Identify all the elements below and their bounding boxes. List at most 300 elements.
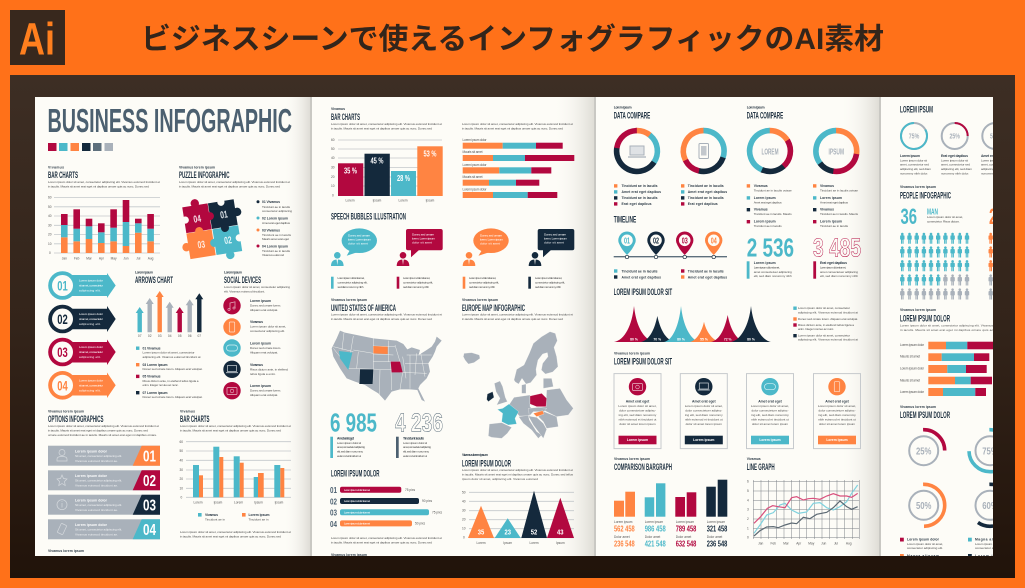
big number 3 485 outline: Erat eget dapibus (820, 261, 847, 265)
big number 3 485 outline: elit, sed diam nonummy nibh (820, 274, 858, 278)
panel: people infographic: Lorem ipsum dolor sit amet, (927, 215, 963, 219)
donut 4: IPSUM (829, 146, 844, 156)
social text: Lorem ipsum (250, 384, 271, 388)
panel: puzzle infographic: Lorem ipsum dolor sit amet, consectetur adipiscing elit. Vivamus euismod tincidunt et (179, 180, 290, 184)
ring captions: amet, consectetur sed (981, 163, 1010, 167)
option 04: Lorem ipsum dolor (75, 523, 108, 527)
panel: stacked bar chart: Vivamus (48, 166, 64, 170)
panel: puzzle infographic (179, 166, 292, 260)
timeline legend (614, 269, 727, 279)
ring captions: adipiscing elit, sed diam (981, 167, 1012, 171)
panel: options infographics: OPTIONS INFOGRAPHICS (48, 414, 104, 425)
panel: percentage bar chart: 10 (331, 184, 335, 188)
timeline legend: Tincidunt ae in laculis (622, 269, 658, 273)
panel: line graph: Mar (783, 542, 790, 546)
option 02: Vivamus euismod tincidunt ae. (75, 484, 118, 488)
big number 4 236 outline: Lorem ipsum dolor sit (403, 441, 427, 445)
panel: triangle chart: Ipsum (556, 541, 565, 545)
arrow 03 (48, 338, 116, 366)
panel: triangle chart: 35 (478, 528, 484, 536)
panel: line graph: 3 (747, 508, 749, 512)
icon: music (223, 297, 241, 314)
big number 2 536: elit, sed diam nonummy nibh (754, 274, 792, 278)
speech bubble crimson: Donec sed ornare (412, 232, 434, 236)
panel: percent rings: LOREM IPSUM (900, 104, 933, 116)
pin 04: 04 (711, 236, 717, 245)
panel: stacked rows: Lorem ipsum dolor (900, 343, 925, 347)
puzzle legend: Vivamus euismod (262, 253, 284, 257)
panel: grouped bar chart: in iaculis. Mauris sit amet erat eget mi dapibus ornare quis ac nunc. Donec sed (180, 428, 281, 432)
ring captions: Lorem ipsum (900, 154, 920, 158)
panel: United States map: UNITED STATES OF AMERICA (331, 303, 396, 314)
panel: United States map: Vivamus lorem ipsum (331, 298, 367, 302)
puzzle legend: Amet erat eget dapibus (262, 221, 290, 225)
donut 3 and 4 legends: Tincidunt ae in laculis (754, 224, 782, 228)
card laptop: Amet erat eget (692, 399, 716, 403)
panel: icon cards: LOREM IPSUM DOLOR SIT (614, 356, 672, 368)
icon: laptop (223, 361, 241, 378)
card phone: dolor consectetuer adipisc- (819, 408, 855, 412)
panel: stacked rows: Mauris sit amet (900, 354, 920, 358)
panel: mountain chart: 55 % (700, 338, 708, 342)
donut 3 and 4 legends: Vivamus (820, 208, 834, 212)
arrows legend: enim. Integer non leo ac nunc. (142, 383, 179, 387)
panel: line graph: 0 (747, 536, 749, 540)
option 04: Vivamus euismod tincidunt ae. (75, 532, 118, 536)
big number 4 236 outline: amet, consectetur adipiscing (403, 445, 431, 449)
puzzle pieces: 04 (193, 214, 202, 226)
social text: Aliquam erat volutpat. (250, 393, 278, 397)
ring captions: Erat eget dapibus (941, 154, 968, 158)
panel: stacked rows: in iaculis. Mauris sit amet erat eget mi dapibus ornare quis ac (900, 328, 993, 332)
panel: stacked bar chart: Mar (86, 256, 93, 260)
card game controller: Lorem ipsum (759, 438, 781, 442)
panel: percentage bar chart: Lorem (345, 198, 355, 202)
panel: stacked bar chart: Feb (74, 256, 80, 260)
panel: comparison bargraph: 789 458 (676, 523, 696, 533)
mountain legend: Lorem ipsum dolor sit amet, consectetur (798, 306, 850, 310)
panel: horizontal stacked bars: Lorem ipsum dolor (462, 187, 487, 191)
big number 4 236 outline: elit, sed diam nonummy (403, 449, 429, 453)
panel: triangle chart: in iaculis. Mauris sit amet erat eget mi dapibus ornare quis ac nunc. Donec sed tellus (462, 472, 573, 476)
card camera: dolor sit amet lorem ipsum (619, 422, 656, 426)
panel: options infographics: Lorem ipsum dolor sit amet, consectetur adipiscing elit. Vivamus euismod tincidunt et (48, 424, 159, 428)
option 01: Sit amet, consectetur adipiscing elit. (75, 454, 122, 458)
option 01: Vivamus euismod tincidunt ae. (75, 459, 118, 463)
panel: percentage bar chart: 60 (331, 138, 335, 142)
social text: Vivamus (250, 320, 263, 324)
panel: grouped bar chart: Lorem ipsum (248, 513, 270, 517)
social text: Vivamus (250, 363, 263, 367)
card phone: dolor sit amet lorem ipsum (819, 422, 856, 426)
big number 2 536: Lorem ipsum (754, 261, 776, 265)
donut 3 and 4 legends (747, 184, 858, 228)
option 04: 04 (143, 522, 156, 539)
panel: line graph: Aug (846, 542, 852, 546)
ring captions: Lorem ipsum dolor sit (941, 158, 968, 162)
panel: mountain chart: 70 % (653, 338, 661, 342)
up arrows (136, 291, 203, 332)
panel: triangle chart: Lorem ipsum dolor sit amet, consectetur adipiscing elit. Vivamus euismod tincidunt et (462, 468, 573, 472)
panel: stacked bar chart: 40 (48, 214, 52, 218)
panel: grouped bar chart: Lorem ipsum dolor sit amet, consectetur adipiscing elit. Vivamus euismod tincidunt et (180, 530, 291, 534)
gauge 25%: 25% (916, 446, 932, 458)
panel: progress bars: Lorem ipsum dolor sit amet (344, 510, 370, 514)
puzzle legend: 03 Vivamus (262, 228, 280, 232)
panel: stacked rows: Lorem ipsum dolor (900, 390, 925, 394)
puzzle pieces: 02 (224, 235, 233, 247)
big number 4 236 outline: 4 236 (395, 408, 443, 438)
puzzle legend: Tincidunt ae in laculis (262, 233, 291, 237)
gauge 75%: 75% (982, 446, 998, 458)
panel: line graph: 6 (747, 480, 749, 484)
card phone: Amet erat eget (825, 399, 850, 403)
panel: percentage bar chart: 30 (331, 166, 335, 170)
panel: line graph: Apr (796, 542, 802, 546)
panel: grouped bar chart: Lorem (234, 500, 243, 504)
panel: triangle chart: 10 (462, 527, 466, 531)
panel: mountain chart (614, 287, 858, 342)
puzzle legend: 04 Lorem ipsum (262, 244, 288, 248)
social text: Aliquam erat volutpat. (250, 308, 278, 312)
big number 6 985: 6 985 (330, 408, 377, 438)
panel: data compare right (741, 106, 865, 228)
panel: stacked rows (900, 308, 997, 396)
donut 1 and 2 legends: Erat eget dapibus (622, 202, 652, 206)
panel: grouped bar chart: Tincidunt ae in (248, 518, 269, 522)
panel: stacked bar chart: Jun (123, 256, 129, 260)
panel: arrows chart: 02 (148, 334, 152, 338)
panel: progress bars: Lorem ipsum dolor sit amet (344, 522, 370, 526)
arrow 02: 02 (57, 311, 68, 327)
card laptop: dolor sit amet lorem ipsum (686, 422, 722, 426)
panel: percentage bar chart: 45 % (370, 156, 384, 166)
panel: progress bars: in iaculis. Mauris sit amet erat eget mi dapibus ornare quis ac nunc. Donec sed (331, 541, 432, 545)
card laptop: ing elit, sed diam nonummy (685, 413, 723, 417)
panel: horizontal stacked bars: Lorem ipsum dolor sit amet, consectetur adipiscing elit. Vivamus euismod tincidunt et (462, 122, 573, 126)
panel: stacked bar chart: 0 (49, 251, 51, 255)
donut 3 and 4 legends: Tincidunt ae in laculis ovtsae (754, 188, 792, 192)
donut 1 and 2 legends: Tincidunt ae in laculis (622, 184, 658, 188)
donut 3 and 4 legends: Lorem ipsum (754, 220, 776, 224)
arrow 04: 04 (57, 377, 68, 393)
social text: consectetur adipiscing elit. (250, 329, 285, 333)
puzzle legend: Tincidunt ae in laculis (262, 249, 290, 253)
panel: percentage bar chart: 28 % (397, 174, 410, 183)
card game controller: dolor sit amet lorem ipsum (752, 422, 789, 426)
arrow 01: 01 (57, 278, 68, 294)
speech captions: Lorem ipsum dolor sit amet, (403, 276, 430, 280)
panel: line graph: 2 (747, 517, 749, 521)
panel: stacked rows: Lorem ipsum dolor sit amet, consectetur adipiscing elit. Vivamus (900, 324, 993, 328)
card game controller (746, 374, 794, 449)
donut 3 and 4 legends: Vivamus (820, 184, 834, 188)
panel: arrows chart: 03 (158, 334, 162, 338)
panel: options infographics: ornare euismod tincidunt ae in iaculis. Mauris sit amet erat eget mi dapibus ornare. (48, 433, 157, 437)
panel: percentage bar chart: in iaculis. Mauris sit amet erat eget mi dapibus ornare quis ac nunc. Donec sed (331, 127, 432, 131)
big number 6 985 (330, 408, 377, 458)
panel: line graph: 4 (747, 498, 749, 502)
card phone (814, 374, 860, 449)
panel: social devices: SOCIAL DEVICES (224, 275, 261, 286)
big number 2 536: 2 536 (747, 233, 794, 263)
option 03: 03 (143, 498, 156, 514)
panel: mountain chart: 80 % (747, 338, 755, 342)
panel: Europe map: Lorem ipsum dolor sit amet, consectetur adipiscing elit. Vivamus euismod tincidunt et (462, 312, 573, 316)
panel: line graph: Jul (834, 542, 838, 546)
option 02: Lorem ipsum dolor (75, 474, 108, 478)
panel: puzzle infographic: PUZZLE INFOGRAPHIC (179, 170, 230, 181)
speech bubble orange: dolor sit amet (480, 242, 500, 246)
panel: stacked bar chart: 20 (48, 232, 52, 236)
icon: game controller (223, 339, 241, 357)
panel: Europe map (462, 298, 573, 438)
panel: stacked bar chart: Apr (99, 256, 105, 260)
panel: grouped bar chart: 50 (180, 449, 183, 453)
panel: grouped bar chart: 10 (180, 486, 183, 490)
colour swatches (48, 143, 113, 151)
panel: comparison bargraph: 236 548 (614, 538, 635, 548)
ring captions: Lorem ipsum dolor sit (900, 158, 927, 162)
panel: percentage bar chart: Lorem (398, 198, 408, 202)
panel: grouped bar chart: Lorem (193, 500, 203, 504)
donut 3 and 4 legends: Lorem ipsum (820, 220, 842, 224)
social text: Aliquam erat volutpat. (250, 350, 278, 354)
panel: triangle chart: 40 (462, 499, 466, 503)
panel: stacked bar chart: 50 (48, 205, 52, 209)
speech bubble teal: lorem. Lorem ipsum (348, 238, 371, 242)
arrow 03: Lorem ipsum dolor (79, 345, 103, 349)
panel: social devices: elit. Vivamus euismod tincidunt. (224, 290, 265, 294)
puzzle legend: Mauris amet erat eget (262, 237, 289, 241)
panel: percentage bar chart: 40 (331, 156, 335, 160)
panel: horizontal stacked bars: Mauris sit amet (462, 150, 483, 154)
panel: progress bars: Lorem ipsum dolor sit amet (344, 499, 370, 503)
panel: comparison bargraph: 562 458 (614, 523, 635, 533)
ring captions: adipiscing elit, sed diam (900, 167, 931, 171)
big number 6 985: amet, consectetur adipiscing (337, 445, 365, 449)
panel: horizontal stacked bars: Mauris sit amet (462, 175, 483, 179)
panel: stacked rows: Vivamus lorem ipsum (900, 308, 936, 312)
panel: people infographic: PEOPLE INFOGRAPHIC (900, 190, 951, 202)
option 01 (48, 446, 160, 466)
card camera: ing elit, sed diam nonummy (619, 413, 657, 417)
arrow 02: Lorem ipsum dolor (79, 312, 103, 316)
donut 3 and 4 legends: Lorem ipsum (754, 196, 776, 200)
panel: progress bars: Vivamus lorem ipsum (331, 553, 367, 557)
puzzle legend: 01 Vivamus (262, 200, 280, 204)
panel: stacked bar chart: Jan (62, 256, 67, 260)
panel: icon cards: Vivamus lorem ipsum (614, 352, 650, 356)
ring captions (900, 154, 1012, 175)
panel: United States map: Lorem ipsum dolor sit amet, consectetur adipiscing elit. Vivamus euismod tincidunt et (331, 312, 442, 316)
big number 4 236 outline: euismod et tincidunt ut (403, 454, 427, 458)
gauge 75% (969, 430, 1011, 472)
social text: tellus ligula a enim. (250, 372, 276, 376)
panel: progress bars: 75 pixs (432, 510, 443, 514)
panel: mountain chart: LOREM IPSUM DOLOR SIT (614, 287, 672, 298)
speech captions: Lorem ipsum dolor sit amet, (469, 276, 496, 280)
arrow 02: sit amet, consectetur (79, 317, 103, 321)
donut 1 and 2 legends: Amet erat eget dapibus (622, 190, 661, 194)
panel: grouped bar chart (180, 410, 291, 538)
arrow 01: Lorem ipsum dolor (79, 278, 103, 282)
gauge 60% (969, 484, 1011, 526)
panel: stacked bar chart: 30 (48, 223, 52, 227)
card laptop: dolor consectetuer adipisc- (685, 408, 722, 412)
ring third: 50% (990, 132, 1001, 141)
arrow 02: adipiscing elit. (79, 322, 101, 326)
pin 03: 03 (682, 236, 688, 245)
panel: progress bars: Lorem ipsum dolor sit amet, consectetur adipiscing elit. Vivamus euismod tincidunt et (331, 536, 442, 540)
panel: speech bubbles (331, 212, 574, 289)
arrows legend: Lorem ipsum dolor sit amet, consectetur (142, 351, 194, 355)
speech bubble navy: lorem. Lorem ipsum (544, 236, 567, 240)
panel: Europe map: EUROPE MAP INFOGRAPHIC (462, 303, 525, 314)
speech bubble crimson: dolor sit amet (412, 240, 432, 244)
panel: line graph: LINE GRAPH (747, 462, 775, 473)
panel: progress bars: 03 (330, 509, 337, 518)
panel: people infographic (900, 185, 997, 300)
option 02: 02 (143, 473, 156, 490)
panel: numbered arrows (48, 271, 116, 400)
card phone: Lorem ipsum dolor sit amet, (818, 404, 856, 408)
card game controller: dolor consectetuer adipisc- (752, 408, 788, 412)
option 04: Sit amet, consectetur adipiscing elit. (75, 528, 122, 532)
arrows legend: adipiscing elit. Vivamus euismod tincidunt at (142, 355, 201, 359)
speech captions: Lorem ipsum dolor sit amet, (535, 276, 562, 280)
card game controller: ing elit, sed diam nonummy (751, 413, 789, 417)
panel: triangle chart: 43 (557, 528, 564, 536)
ring captions: Lorem ipsum dolor sit (981, 158, 1008, 162)
arrows legend: Donec sed ornare lorem. Aliquam erat volutpat. (142, 395, 203, 399)
arrow 03: adipiscing elit. (79, 355, 101, 359)
donut 1 and 2 legends: Amet erat eget dapibus (688, 190, 727, 194)
panel: stacked bar chart: Lorem ipsum dolor sit amet, consectetur adipiscing elit. Vivamus euismod tincidunt et (48, 180, 160, 184)
panel: comparison bargraph: Vivamus lorem ipsum (614, 457, 650, 461)
big number 2 536: Lorem ipsum dolor sit amet, (754, 265, 780, 269)
option 01: Lorem ipsum dolor (75, 450, 108, 454)
panel: grouped bar chart: Ipsum (214, 500, 223, 504)
big number 3 485 outline (813, 233, 861, 279)
donut 1 and 2 legends (614, 184, 727, 206)
gauges legend: Magna aliquam (975, 538, 1005, 542)
panel: puzzle infographic: in iaculis. Mauris sit amet erat eget mi dapibus ornare quis ac nunc. Donec sed (179, 185, 280, 189)
pin 02: 02 (653, 236, 659, 245)
panel: stacked rows: Mauris sit amet (900, 378, 920, 382)
panel: radial percent gauges: LOREM IPSUM DOLOR (900, 410, 950, 421)
panel: grouped bar chart: 60 (180, 440, 183, 444)
panel: percentage bar chart: Lorem ipsum dolor sit amet, consectetur adipiscing elit. Vivamus euismod tincidunt et (331, 122, 442, 126)
option 03: Lorem ipsum dolor (75, 498, 108, 502)
pin 01: 01 (624, 236, 630, 245)
social text: Risus dictum ante, in eleifend (250, 367, 288, 371)
panel: grouped bar chart: Vivamus (205, 513, 218, 517)
panel: triangle chart: ipsum dolor sit amet, adipiscing elit. Vivamus euismod (462, 477, 538, 481)
panel: grouped bar chart: 0 (180, 495, 182, 499)
donut 3 and 4 legends: Vivamus (754, 184, 768, 188)
card camera: Lorem ipsum dolor sit amet, (618, 404, 657, 408)
speech captions: consectetur adipiscing elit, (403, 280, 433, 284)
people pictogram teal and gray (900, 233, 993, 300)
panel: progress bars: 90 pixs (422, 499, 433, 503)
panel: comparison bargraph: 321 458 (707, 523, 727, 533)
panel: progress bars: Lorem ipsum dolor sit amet (344, 488, 370, 492)
arrow 01: adipiscing elit. (79, 288, 101, 292)
speech bubble navy: dolor sit amet (544, 240, 564, 244)
puzzle pieces (182, 199, 242, 260)
panel: arrows chart: 07 (138, 334, 142, 338)
panel: triangle chart: Ipsum (503, 541, 512, 545)
arrow 03: sit amet, consectetur (79, 350, 103, 354)
panel: percentage bar chart: 35 % (344, 166, 357, 176)
panel: percentage bar chart: 20 (331, 175, 335, 179)
page 1 heading: BUSINESS INFOGRAPHIC (48, 102, 292, 139)
gauges legend: Lorem ipsum dolor sit amet, (975, 542, 1011, 546)
USA map shape (332, 331, 442, 402)
panel: Europe map: in iaculis. Mauris sit amet erat eget mi dapibus ornare quis ac nunc. Donec sed (462, 317, 563, 321)
panel: comparison bargraph: Lorem ipsum (614, 520, 633, 524)
panel: arrows chart: 05 (178, 334, 182, 338)
ring captions: amet, consectetur sed (941, 163, 970, 167)
mountain legend: Risus dictum ante, in eleifend tellus ligula a (798, 323, 854, 327)
panel: grouped bar chart: Vivamus (180, 410, 195, 414)
social text: Donec sed ornare lorem. (250, 303, 281, 307)
speech captions: consectetur adipiscing elit, (469, 280, 499, 284)
page 1 footer label: Vivamus lorem ipsum (48, 549, 84, 553)
panel: percentage bar chart: Vivamus (331, 107, 345, 111)
speech bubble orange (463, 228, 509, 266)
card phone: nibh euismod et tincidunt ut (818, 418, 856, 422)
mountain legend: adipiscing elit. Vivamus euismod tincidunt at (798, 338, 858, 342)
panel: timeline (614, 214, 727, 279)
donut 3 and 4 legends: Tincidunt ae in laculis (820, 224, 848, 228)
arrows legend: 05 Vivamus (142, 374, 161, 378)
card phone: ing elit, sed diam nonummy (818, 413, 856, 417)
panel: data compare right: Lorem ipsum (747, 106, 765, 110)
card camera: Amet erat eget (626, 399, 650, 403)
panel: social devices: Lorem ipsum (224, 270, 242, 274)
panel: stacked bar chart (48, 166, 160, 260)
puzzle legend (256, 200, 292, 257)
donut 1 (608, 122, 666, 180)
panel: comparison bargraph: Dolor amet (707, 535, 722, 539)
mountain legend: adipiscing elit. Vivamus euismod tincidunt at (798, 310, 858, 314)
card camera: nibh euismod et tincidunt ut (619, 418, 656, 422)
panel: progress bars: 50 pixs (415, 522, 426, 526)
social text: Lorem ipsum dolor sit amet, (250, 324, 286, 328)
big number 4 236 outline (395, 408, 443, 458)
social text: Lorem ipsum (250, 342, 271, 346)
panel: line graph: 5 (747, 489, 749, 493)
panel: percentage bar chart: 50 (331, 147, 335, 151)
big number 6 985: Amet erat eget (337, 436, 355, 440)
donut 2 (677, 124, 731, 178)
big number 6 985: elit, sed diam nonummy (337, 449, 363, 453)
panel: triangle chart: 23 (504, 528, 511, 536)
panel: line graph: 1 (747, 526, 749, 530)
panel: grouped bar chart: 40 (180, 458, 183, 462)
panel: comparison bargraph (614, 457, 727, 548)
panel: progress bars: 04 (330, 520, 337, 529)
big number 3 485 outline: amet consectetuer adipiscing (820, 270, 858, 274)
panel: horizontal stacked bars: Lorem ipsum dolor (462, 163, 487, 167)
panel: percentage bar chart (331, 107, 443, 202)
donut 3 and 4 legends: Amet erat eget dapibus (754, 200, 782, 204)
panel: data compare left (608, 106, 731, 206)
icon: phone (223, 318, 241, 336)
panel: progress bars (330, 468, 443, 557)
